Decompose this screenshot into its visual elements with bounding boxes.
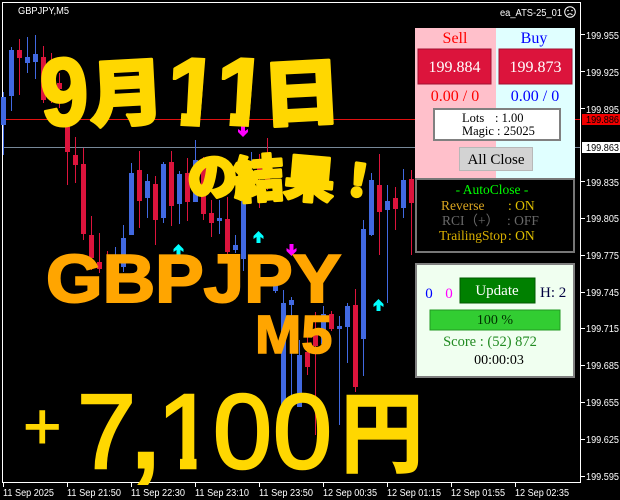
profit figure: 00 — [213, 373, 333, 491]
reverse setting — [441, 198, 535, 213]
time axis: 11 Sep 22:30 — [131, 488, 185, 499]
chart: horizontal price lines — [3, 119, 580, 148]
chart: blue rising candles — [1, 35, 406, 460]
score: Score : (52) 872 — [443, 334, 537, 350]
chart symbol label: GBPJPY,M5 — [18, 6, 69, 17]
reverse setting: Reverse — [441, 198, 484, 213]
expert advisor label with sad face icon: ea_ATS-25_01 — [500, 8, 562, 19]
time axis: 11 Sep 21:50 — [67, 488, 121, 499]
profit figure: 7 — [77, 373, 136, 491]
lots and magic box: Lots — [462, 111, 484, 125]
rci setting: : OFF — [507, 213, 539, 228]
subtitle: result: の — [185, 148, 240, 208]
all close button — [460, 148, 532, 170]
trailing stop setting: TrailingStop — [439, 228, 507, 243]
buy heading: Buy — [521, 30, 547, 47]
lots and magic box: Magic : 25025 — [462, 124, 535, 138]
buy price button — [499, 49, 572, 84]
chart: red falling candles — [17, 39, 414, 435]
rci setting: RCI（+） — [442, 213, 499, 228]
sell price button: 199.884 — [428, 59, 480, 76]
title: date headline: 1 — [164, 38, 223, 147]
time axis: 12 Sep 00:35 — [323, 488, 377, 499]
blue counter: 0 — [425, 286, 433, 302]
subtitle: result — [185, 148, 383, 210]
profit figure: , — [131, 373, 160, 491]
subtitle: result: 結 — [232, 150, 286, 210]
time axis: 12 Sep 01:15 — [387, 488, 441, 499]
timeframe label: M5 — [255, 304, 332, 365]
lots and magic box: : 1.00 — [495, 111, 523, 125]
auto close heading: - AutoClose - — [456, 182, 529, 197]
yen symbol: 円 — [341, 387, 423, 485]
profit figure: 1 — [157, 373, 216, 491]
profit figure: + — [23, 389, 62, 463]
update button — [460, 278, 535, 303]
sell price button — [418, 49, 491, 84]
reverse setting: : ON — [508, 198, 535, 213]
buy profit and count: 0.00 / 0 — [511, 88, 559, 105]
title: date headline: 日 — [260, 52, 343, 137]
progress bar — [430, 310, 560, 330]
signal arrows: cyan buy — [174, 231, 384, 311]
time axis: 12 Sep 02:35 — [515, 488, 569, 499]
time axis: 11 Sep 23:50 — [259, 488, 313, 499]
lots and magic box — [434, 109, 560, 140]
title: date headline: 月 — [87, 52, 167, 137]
price axis — [581, 31, 619, 483]
subtitle: result: ！ — [333, 154, 383, 209]
title: date headline: 1 — [213, 38, 272, 147]
elapsed timer: 00:00:03 — [474, 353, 524, 368]
sell profit and count: 0.00 / 0 — [431, 88, 479, 105]
panel: auto close settings — [416, 179, 574, 252]
update button: Update — [475, 283, 519, 299]
signal arrows: magenta sell — [71, 107, 296, 256]
title: date headline: 9 — [37, 38, 91, 147]
history count: H: 2 — [540, 285, 566, 301]
progress bar: 100 % — [477, 313, 513, 328]
time axis — [3, 483, 569, 499]
time axis: 11 Sep 2025 — [3, 488, 54, 499]
profit figure — [26, 392, 418, 485]
subtitle: result: 果 — [282, 150, 337, 210]
magenta counter: 0 — [445, 286, 453, 302]
sell heading: Sell — [443, 30, 468, 47]
trailing stop setting: : ON — [508, 228, 535, 243]
rci setting — [442, 213, 539, 228]
all close button: All Close — [467, 152, 525, 168]
time axis: 11 Sep 23:10 — [195, 488, 249, 499]
buy price button: 199.873 — [510, 59, 562, 76]
time axis: 12 Sep 01:55 — [451, 488, 505, 499]
currency pair label: GBPJPY — [46, 240, 341, 316]
panel: update and score — [416, 264, 574, 377]
panel: sell and buy order panel — [415, 28, 575, 178]
title: date headline — [41, 56, 334, 129]
